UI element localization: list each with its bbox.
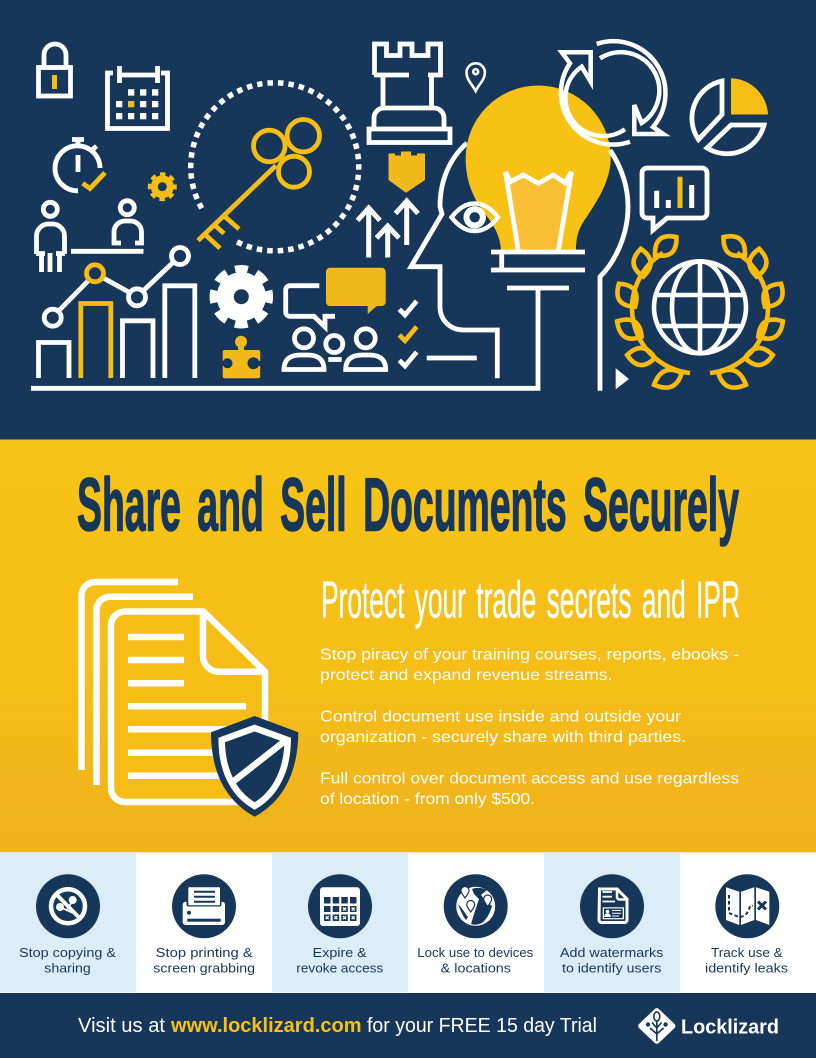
feature: lock to devices (417, 874, 534, 976)
icon: play triangle (616, 368, 629, 389)
icon: rook tower (369, 44, 450, 142)
icon: eye (452, 204, 498, 231)
icon: stopwatch (55, 140, 105, 191)
text block: benefits: Control document use inside and outside your (320, 708, 682, 726)
feature: watermarks (544, 852, 680, 992)
feature: track use: identify leaks (705, 960, 789, 976)
text block: benefits (320, 646, 739, 808)
panel: illustration band (0, 0, 816, 440)
icon: small yellow gear (150, 174, 175, 199)
icon: globe (654, 261, 746, 353)
panel: feature strip (0, 852, 816, 992)
icon: map pin (466, 63, 485, 91)
text: call to action: Visit us at (78, 1014, 165, 1037)
text block: benefits: organization - securely share with third parties. (320, 729, 686, 746)
text block: benefits: protect and expand revenue streams. (320, 667, 612, 684)
text block: benefits: Full control over document access and use regardless (320, 770, 739, 787)
icon: speech bubbles (286, 268, 386, 327)
head back outline (600, 150, 628, 391)
feature: stop copying: Stop copying & (19, 945, 116, 960)
chart: pie icon (692, 78, 768, 154)
icon: light bulb (466, 86, 611, 270)
panel: yellow message (0, 440, 816, 852)
feature: expire access: Expire & (313, 945, 367, 960)
feature: stop copying: sharing (44, 960, 91, 976)
icon: circular arrows (561, 41, 665, 145)
icon: shield (211, 716, 298, 817)
feature: expire access: revoke access (296, 960, 384, 976)
feature: track use: Track use & (711, 945, 783, 960)
text block: benefits: Stop piracy of your training courses, reports, ebooks - (320, 646, 739, 663)
icon: document stack with shield (82, 582, 298, 817)
icon: three people group (284, 329, 386, 370)
text: call to action: for your FREE 15 day Trial (367, 1014, 597, 1037)
icon: big white gear (214, 270, 268, 324)
icon: key (198, 120, 319, 248)
icon: padlock (38, 44, 70, 96)
feature: expire access (272, 852, 408, 992)
icon: checklist (399, 301, 417, 366)
feature: stop printing: screen grabbing (153, 960, 255, 976)
icon: laurel wreath (612, 230, 788, 393)
chart: rising bars and line (38, 248, 195, 378)
icon: up arrows (358, 201, 418, 258)
feature: stop printing: Stop printing & (156, 945, 253, 960)
head outline (411, 143, 497, 378)
logo: Locklizard (638, 1008, 779, 1044)
feature: watermarks: to identify users (562, 960, 662, 976)
baseline stem and checklist rule (31, 288, 569, 388)
text: call to action: www.locklizard.com (170, 1014, 362, 1037)
icon: yellow shield badge (388, 152, 425, 193)
feature: lock to devices: & locations (441, 960, 512, 976)
logo: Locklizard: Locklizard (681, 1016, 779, 1038)
feature: stop printing (153, 874, 255, 976)
text: call to action (78, 1014, 597, 1037)
feature: stop copying (0, 852, 136, 992)
feature: lock to devices: Lock use to devices (417, 945, 534, 960)
icon: puzzle piece (222, 336, 261, 378)
feature: watermarks: Add watermarks (560, 945, 664, 960)
icon: chart speech bubble (642, 168, 707, 230)
panel: footer (0, 993, 816, 1058)
text block: benefits: of location - from only $500. (320, 791, 535, 808)
icon: two people at desk (36, 201, 144, 272)
feature: track use (705, 874, 789, 976)
icon: calendar (108, 66, 168, 128)
icon: dotted circle (191, 83, 359, 251)
